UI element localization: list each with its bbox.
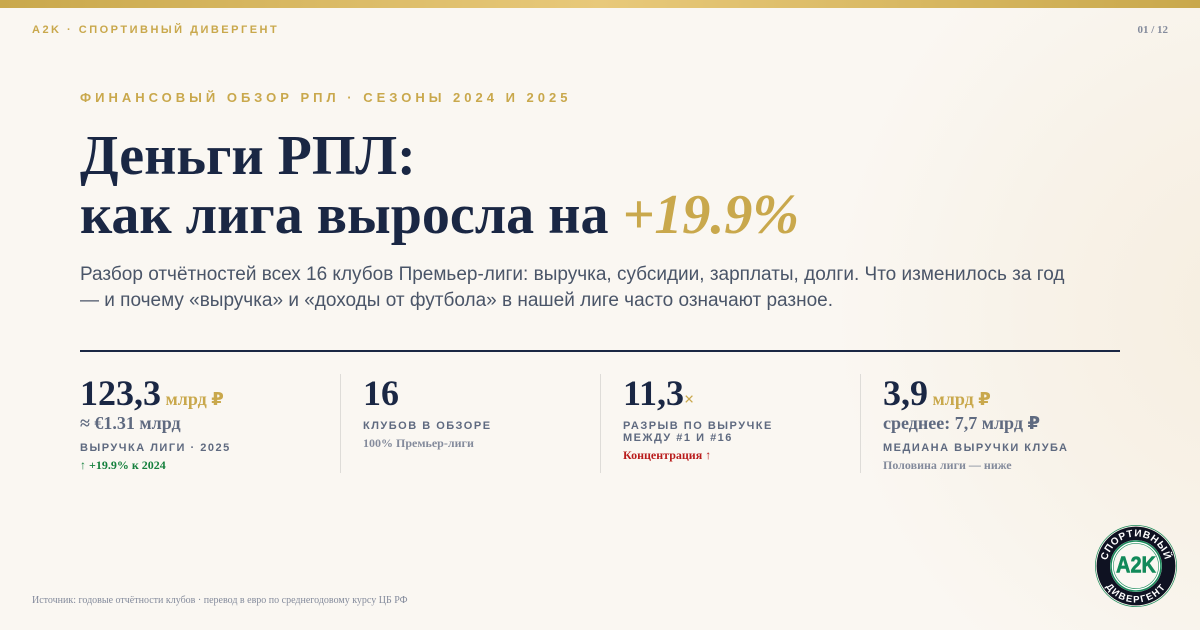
divider	[600, 374, 601, 473]
logo badge: СПОРТИВНЫЙ	[1101, 529, 1174, 560]
source note: Источник: годовые отчётности клубов · перевод в евро по среднегодовому курсу ЦБ РФ	[32, 595, 408, 606]
title: как лига выросла на +19.9%	[80, 184, 799, 246]
stat: revenue gap: РАЗРЫВ ПО ВЫРУЧКЕ	[623, 420, 773, 432]
stat: league revenue: ≈ €1.31 млрд	[80, 413, 181, 433]
stat: median revenue: среднее: 7,7 млрд ₽	[883, 413, 1040, 434]
top accent bar	[0, 0, 1200, 8]
title	[80, 125, 799, 246]
stat: clubs: КЛУБОВ В ОБЗОРЕ	[363, 420, 492, 432]
page counter: 01 / 12	[1137, 24, 1168, 36]
horizontal rule	[80, 350, 1120, 352]
brand header: A2K · СПОРТИВНЫЙ ДИВЕРГЕНТ	[32, 24, 279, 36]
stat: clubs	[363, 373, 492, 450]
logo badge: ДИВЕРГЕНТ	[1104, 584, 1164, 603]
stat: revenue gap: 11,3×	[623, 373, 694, 413]
stat: revenue gap	[623, 373, 773, 462]
stat: revenue gap: МЕЖДУ #1 И #16	[623, 432, 733, 444]
stat: median revenue: 3,9 млрд ₽	[883, 373, 991, 413]
stat: league revenue: ВЫРУЧКА ЛИГИ · 2025	[80, 442, 231, 454]
divider	[340, 374, 341, 473]
stat: league revenue	[80, 373, 231, 472]
description	[80, 264, 1064, 311]
stat: median revenue: МЕДИАНА ВЫРУЧКИ КЛУБА	[883, 442, 1068, 454]
stat: revenue gap: Концентрация ↑	[623, 448, 711, 462]
stat: clubs: 16	[363, 373, 399, 413]
stat: median revenue	[883, 373, 1068, 472]
description: Разбор отчётностей всех 16 клубов Премьер-лиги: выручка, субсидии, зарплаты, долги. Что изменилось за год	[80, 264, 1064, 285]
logo badge	[1095, 525, 1177, 607]
stat: league revenue: 123,3 млрд ₽	[80, 373, 224, 413]
title: Деньги РПЛ:	[80, 125, 416, 187]
logo badge: A2K	[1116, 552, 1156, 578]
eyebrow: ФИНАНСОВЫЙ ОБЗОР РПЛ · СЕЗОНЫ 2024 И 2025	[80, 90, 571, 105]
stat: league revenue: ↑ +19.9% к 2024	[80, 458, 166, 472]
description: — и почему «выручка» и «доходы от футбола» в нашей лиге часто означают разное.	[80, 290, 833, 311]
stat: median revenue: Половина лиги — ниже	[883, 458, 1012, 472]
stat: clubs: 100% Премьер-лиги	[363, 436, 474, 450]
divider	[860, 374, 861, 473]
